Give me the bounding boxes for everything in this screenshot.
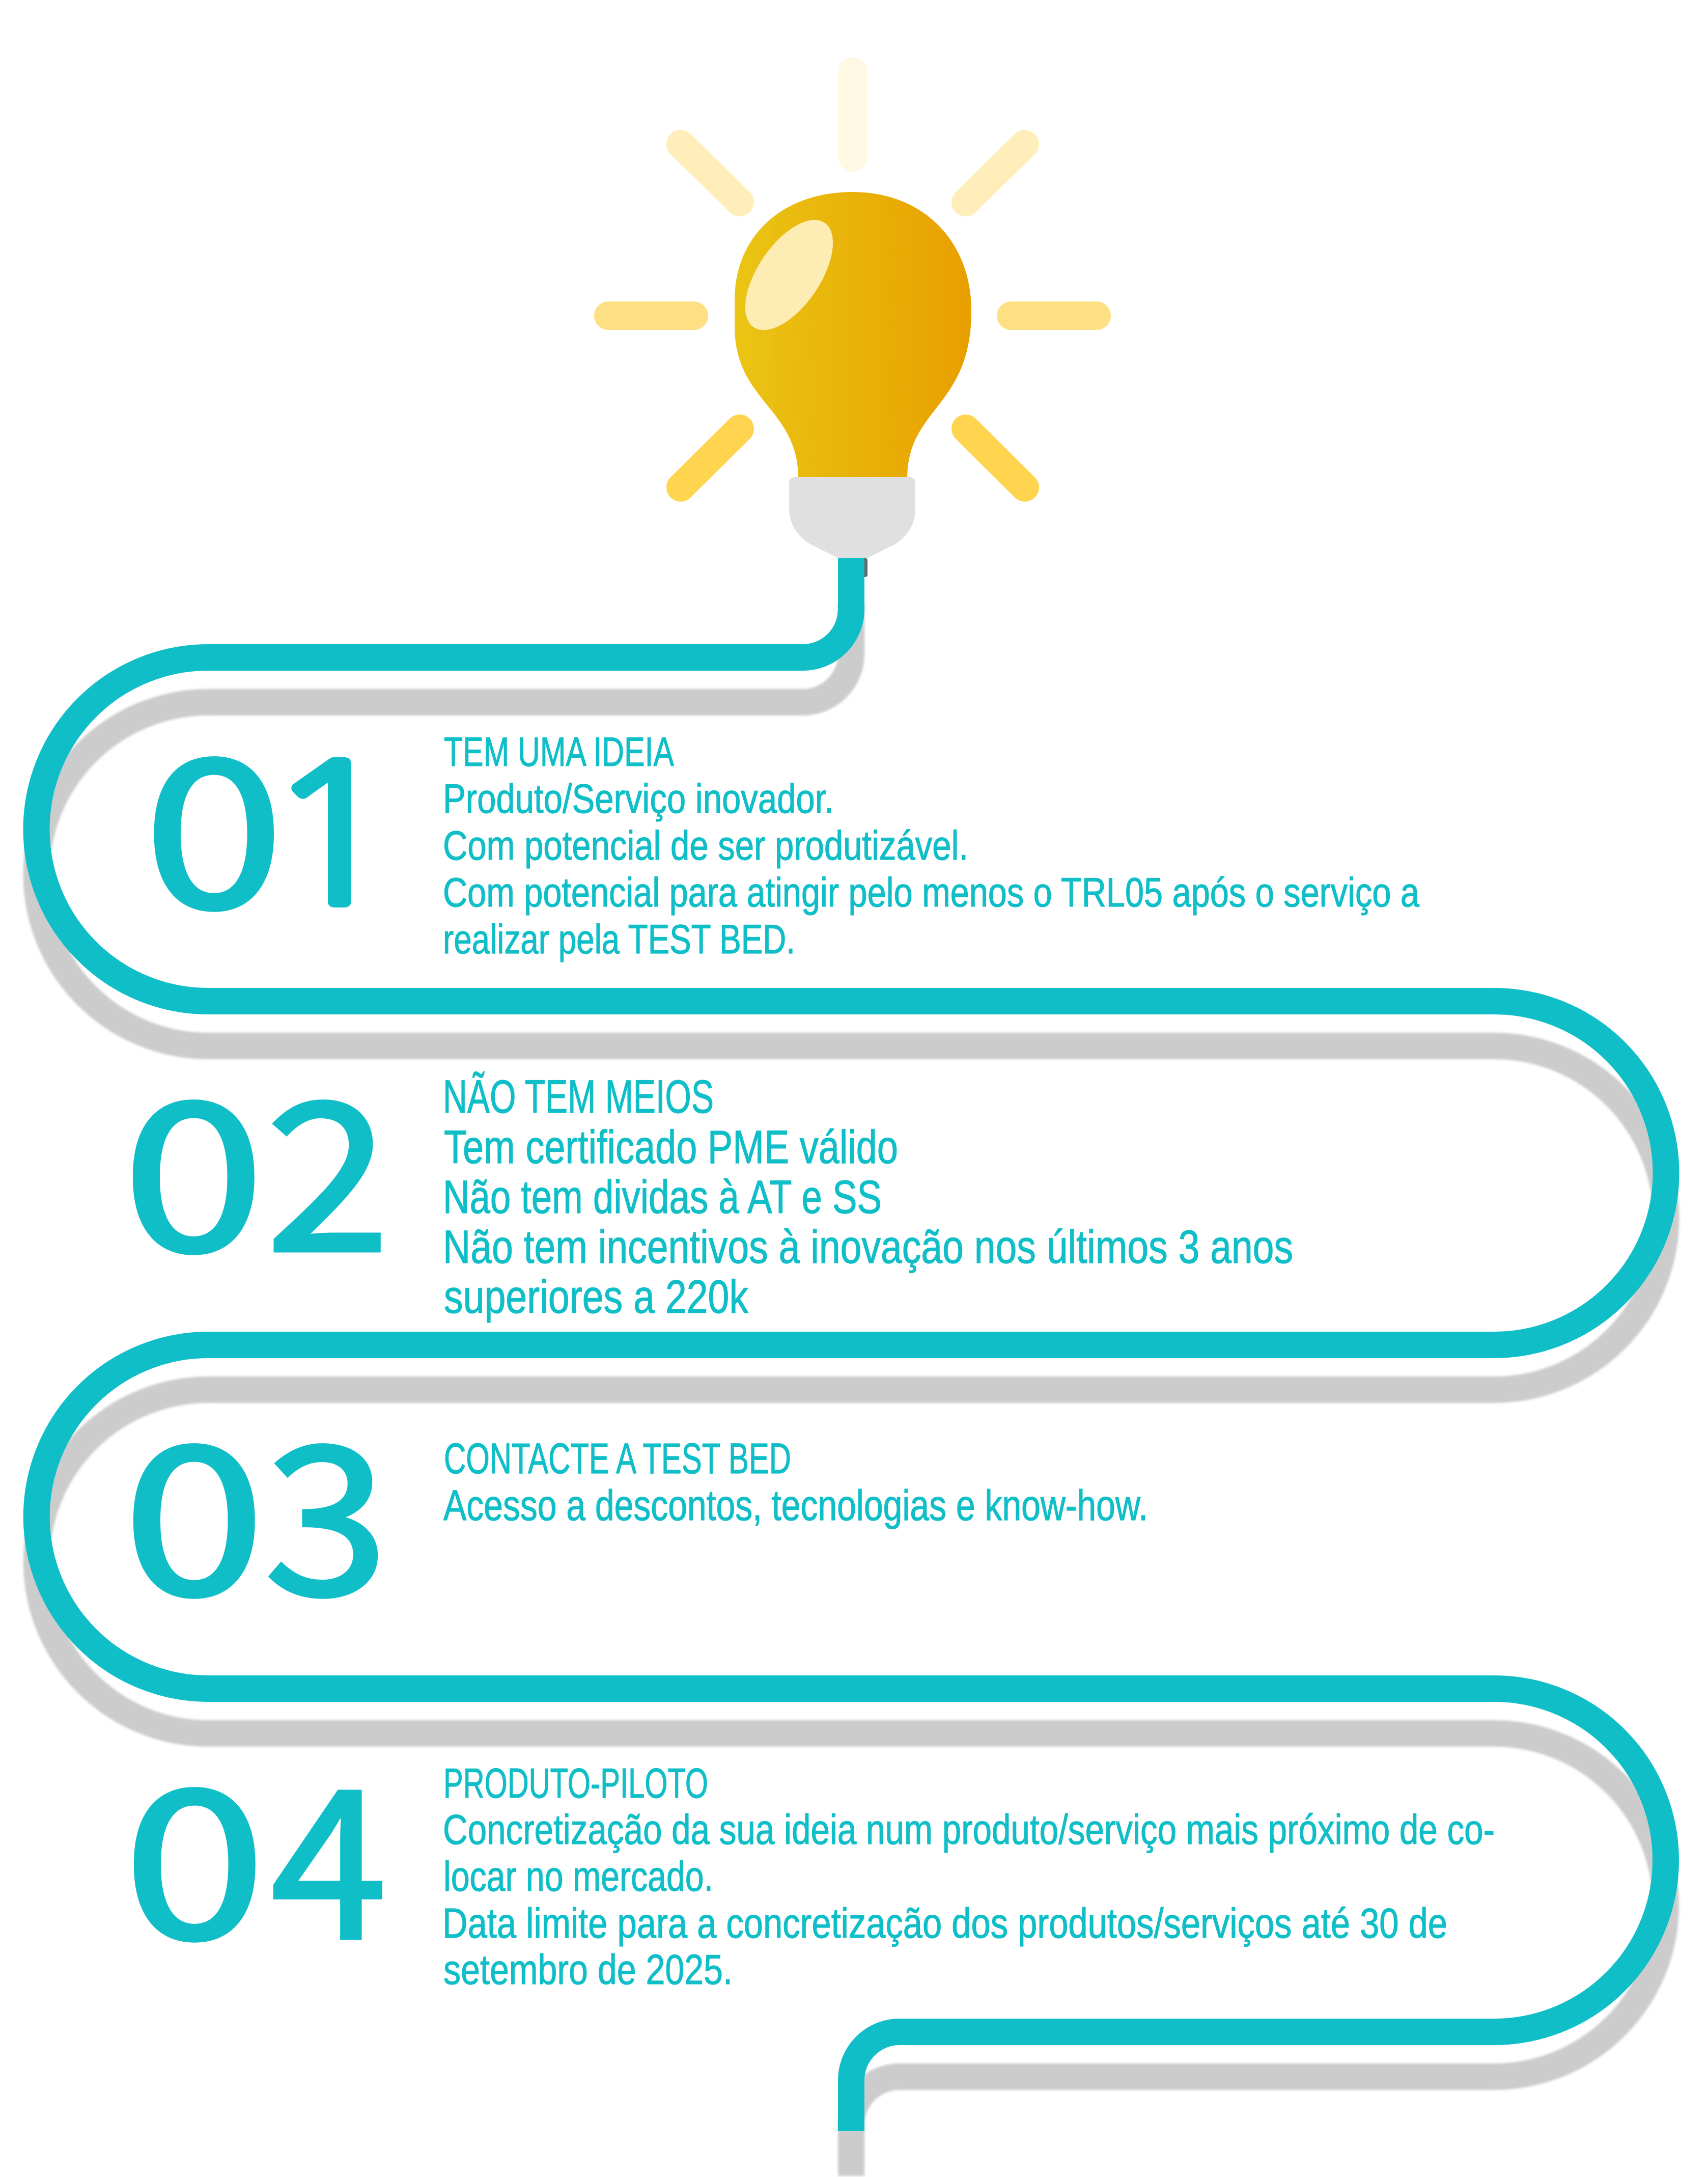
bulb base	[789, 477, 915, 558]
step 02 number	[122, 1012, 390, 1310]
bulb glass	[735, 192, 971, 479]
ray: lower right	[966, 429, 1025, 487]
step 04 body: locar no mercado.	[443, 1853, 713, 1900]
step 03 body: Acesso a descontos, tecnologias e know-how.	[443, 1481, 1148, 1529]
ray: left	[608, 301, 694, 330]
icon: light bulb with rays	[608, 72, 1097, 577]
ray: top	[838, 72, 867, 157]
step 02 number: 0	[122, 1012, 265, 1310]
step 02 body: Tem certificado PME válido	[444, 1121, 898, 1173]
step 04 number: 0	[123, 1700, 266, 1998]
step 02 heading: NÃO TEM MEIOS	[443, 1071, 714, 1123]
step 04 number: 4	[271, 1700, 387, 1998]
step 04 body: setembro de 2025.	[443, 1946, 733, 1993]
step 01 text	[443, 729, 1420, 962]
step 02 body	[443, 1121, 1293, 1323]
step 01 body: realizar pela TEST BED.	[443, 917, 795, 962]
cable shadow	[36, 603, 1666, 2176]
ray: right	[1011, 301, 1097, 330]
cable path	[36, 558, 1666, 2131]
step 03 text	[443, 1435, 1148, 1529]
step 04 body: Concretização da sua ideia num produto/serviço mais próximo de co-	[443, 1806, 1495, 1853]
step 02 body: Não tem dividas à AT e SS	[443, 1171, 882, 1223]
step 04 heading: PRODUTO-PILOTO	[443, 1759, 708, 1807]
ray: upper right	[966, 144, 1025, 202]
step 04 body: Data limite para a concretização dos produtos/serviços até 30 de	[442, 1899, 1447, 1947]
step 01 number	[144, 669, 402, 967]
step 02 number: 2	[266, 1012, 390, 1310]
step 02 body: superiores a 220k	[444, 1271, 749, 1323]
step 03 number: 0	[123, 1356, 265, 1654]
step 01 number: 1	[262, 738, 402, 932]
ray: lower left	[681, 429, 740, 487]
step 04 body	[442, 1806, 1495, 1993]
step 03 number: 3	[264, 1356, 388, 1654]
step 01 number: 0	[144, 669, 284, 967]
step 01 heading: TEM UMA IDEIA	[444, 729, 674, 775]
ray: upper left	[681, 144, 740, 202]
step 01 body: Com potencial para atingir pelo menos o TRL05 após o serviço a	[443, 870, 1420, 916]
step 02 body: Não tem incentivos à inovação nos últimos 3 anos	[443, 1221, 1293, 1273]
step 01 body	[443, 776, 1420, 962]
step 01 body: Com potencial de ser produtizável.	[443, 823, 968, 869]
step 01 body: Produto/Serviço inovador.	[443, 776, 834, 822]
step 04 text	[442, 1759, 1495, 1993]
step 02 text	[443, 1071, 1293, 1323]
step 03 heading: CONTACTE A TEST BED	[444, 1435, 791, 1482]
step 04 number	[123, 1700, 387, 1998]
bulb highlight	[728, 205, 850, 345]
step 03 number	[123, 1356, 388, 1654]
cable plug	[838, 558, 867, 577]
